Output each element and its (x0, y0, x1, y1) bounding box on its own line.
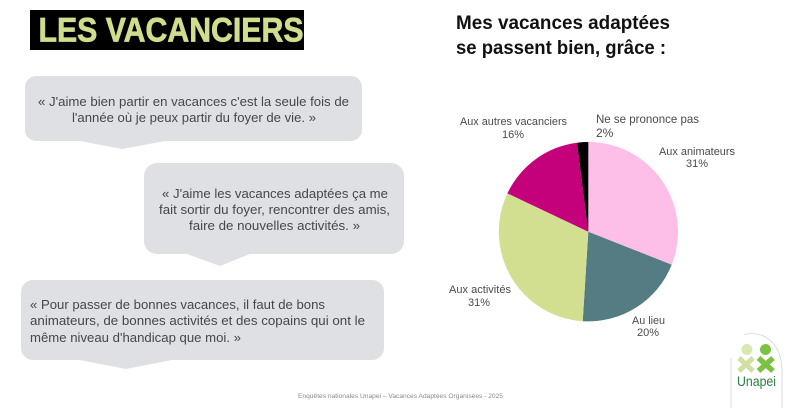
label: au lieu (632, 315, 665, 339)
speech bubble 1 (25, 76, 362, 149)
label: aux autres vacanciers: 16% (502, 129, 524, 141)
footer source: Enquêtes nationales Unapei – Vacances Adaptées Organisées - 2025 (298, 393, 503, 400)
speech bubble 2: fait sortir du foyer, rencontrer des amis, (159, 203, 390, 217)
label: ne se prononce pas: 2% (596, 126, 614, 140)
slice: au lieu 20% (583, 232, 672, 321)
speech bubble 3: même niveau d'handicap que moi. » (30, 331, 241, 345)
label: aux animateurs: Aux animateurs (659, 146, 735, 158)
logo wordmark: Unapei (737, 374, 776, 389)
slice: aux animateurs 31% (588, 142, 678, 265)
label: au lieu: Au lieu (632, 315, 665, 327)
speech bubble 3 (21, 280, 384, 369)
title: LES VACANCIERS (38, 12, 304, 50)
heading: pie chart: se passent bien, grâce : (456, 38, 666, 59)
label: aux animateurs (659, 146, 735, 170)
label: ne se prononce pas (596, 112, 699, 140)
slice: ne se prononce pas 2% (577, 142, 588, 232)
speech bubble 3: « Pour passer de bonnes vacances, il faut de bons (30, 298, 325, 312)
logo: Unapei (731, 334, 782, 408)
label: aux activités: 31% (468, 297, 490, 309)
label: aux animateurs: 31% (686, 158, 708, 170)
speech bubble 1: « J'aime bien partir en vacances c'est la seule fois de (38, 95, 349, 109)
speech bubble 1: l'année où je peux partir du foyer de vie. » (72, 111, 316, 125)
label: aux activités: Aux activités (449, 284, 511, 296)
icon: light green figure (739, 344, 753, 371)
slice: aux autres vacanciers 16% (507, 143, 588, 232)
speech bubble 3: animateurs, de bonnes activités et des copains qui ont le (30, 314, 365, 328)
icon: dark green figure (758, 344, 773, 371)
label: aux autres vacanciers (460, 116, 567, 141)
speech bubble 2: « J'aime les vacances adaptées ça me (162, 187, 388, 201)
heading: pie chart (456, 13, 670, 59)
speech bubble 2: faire de nouvelles activités. » (189, 219, 360, 233)
heading: pie chart: Mes vacances adaptées (456, 13, 670, 34)
slice: aux activités 31% (499, 193, 588, 321)
label: au lieu: 20% (637, 327, 659, 339)
label: ne se prononce pas: Ne se prononce pas (596, 112, 699, 126)
label: aux autres vacanciers: Aux autres vacanciers (460, 116, 567, 128)
speech bubble 2 (144, 163, 404, 266)
pie chart (499, 142, 678, 321)
label: aux activités (449, 284, 511, 309)
